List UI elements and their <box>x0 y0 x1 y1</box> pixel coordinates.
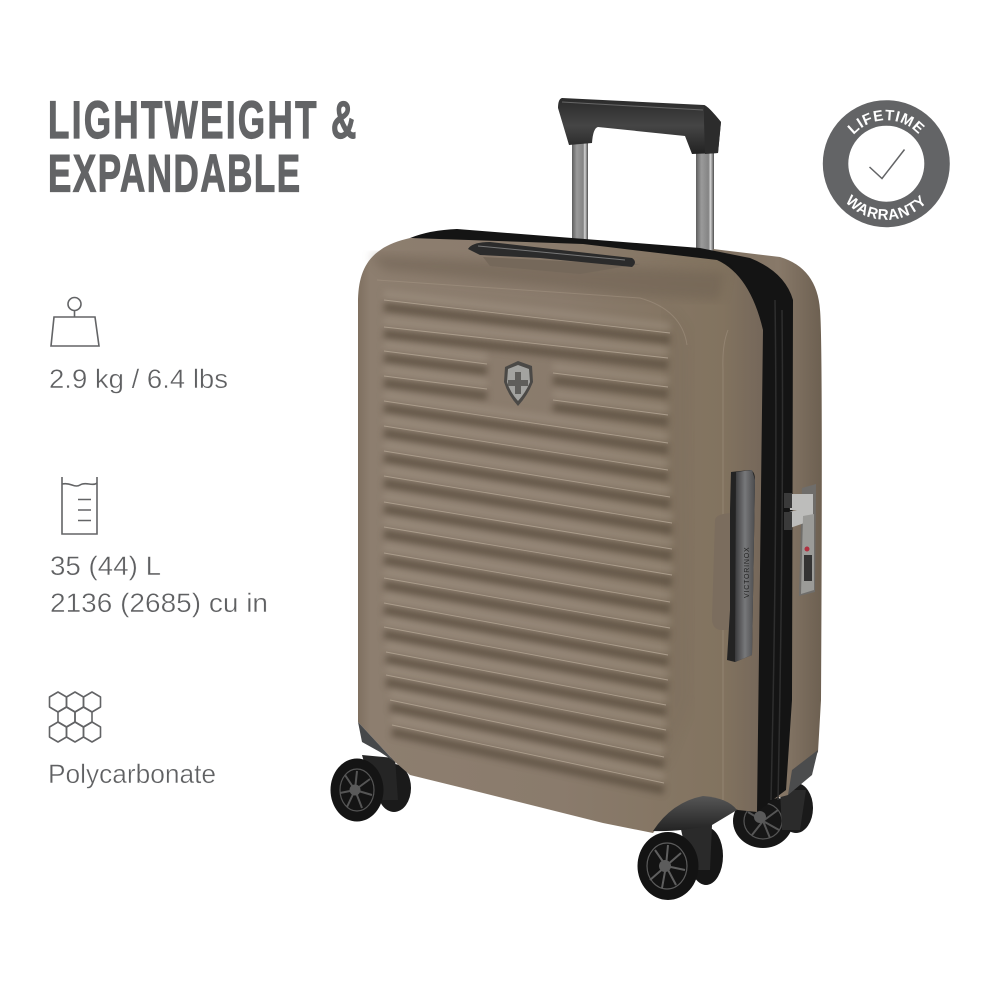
volume text: 35 (44) L <box>50 551 161 581</box>
title: EXPANDABLE <box>48 143 300 203</box>
rib lines <box>384 300 672 783</box>
telescopic handle grip <box>558 98 721 154</box>
top carry handle <box>468 242 640 274</box>
combination lock <box>784 484 816 596</box>
rib shadows <box>384 307 672 790</box>
rib highlights <box>384 294 672 777</box>
front shell <box>358 238 763 833</box>
logo shield <box>504 361 533 406</box>
volume text <box>50 551 268 618</box>
icon: polycarbonate honeycomb <box>50 692 100 742</box>
zipper <box>410 229 793 814</box>
rear wheels <box>733 783 813 848</box>
suitcase <box>330 98 822 900</box>
left wheels <box>330 755 411 822</box>
weight text: 2.9 kg / 6.4 lbs <box>49 364 228 394</box>
material text: Polycarbonate <box>48 759 216 789</box>
front wheels <box>638 825 723 900</box>
front panel outline <box>377 280 728 800</box>
wheel housings <box>358 722 818 831</box>
badge: lifetime warranty: LIFETIME <box>847 110 925 134</box>
title <box>48 90 356 203</box>
side carry handle: VICTORINOX <box>744 547 751 598</box>
badge: lifetime warranty <box>822 100 950 228</box>
shell shading <box>370 255 725 770</box>
right side shell <box>713 249 822 800</box>
icon: volume beaker <box>62 477 97 534</box>
telescopic handle poles <box>572 140 714 252</box>
icon: weight <box>51 298 99 346</box>
side carry handle <box>712 470 755 662</box>
badge: lifetime warranty: WARRANTY <box>847 194 924 220</box>
title: LIGHTWEIGHT & <box>48 90 356 150</box>
volume text: 2136 (2685) cu in <box>50 588 268 618</box>
